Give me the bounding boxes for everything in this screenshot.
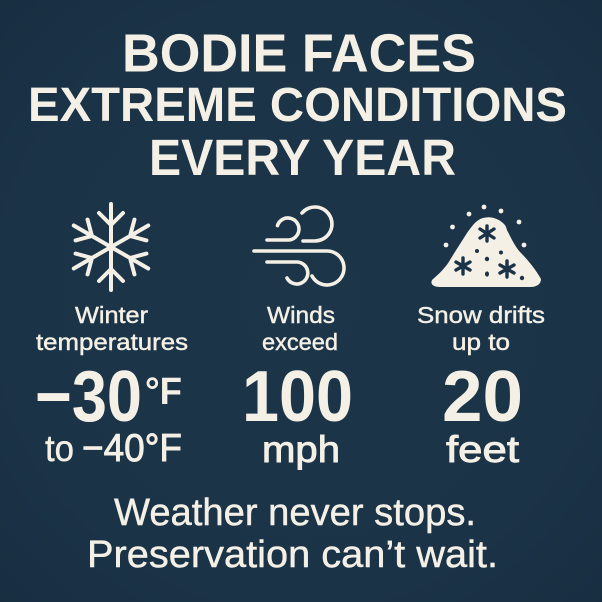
column: winter temperatures: −40°F	[82, 427, 182, 470]
title: BODIE FACES	[122, 24, 476, 84]
icon: snowflake	[68, 204, 154, 290]
title	[28, 24, 567, 186]
closing message	[87, 492, 498, 576]
column: winds: mph	[262, 429, 340, 470]
title: EVERY YEAR	[149, 129, 456, 186]
icon: wind	[254, 207, 344, 285]
column: winds: 100	[242, 357, 353, 437]
column: winds: exceed	[262, 329, 338, 355]
closing message: Weather never stops.	[114, 492, 476, 534]
column: winter temperatures: Winter	[75, 302, 148, 328]
column: snow drifts: feet	[446, 429, 520, 470]
column: winter temperatures: −30	[35, 357, 142, 437]
column: winter temperatures: to	[45, 428, 74, 469]
icon: snow pile	[431, 205, 541, 287]
column: winter temperatures: °F	[145, 371, 182, 413]
column: winter temperatures	[35, 302, 188, 470]
column: winds: Winds	[267, 302, 335, 328]
column: winter temperatures: temperatures	[36, 329, 188, 355]
closing message: Preservation can’t wait.	[87, 534, 498, 576]
column: snow drifts	[417, 302, 545, 470]
column: snow drifts: 20	[442, 357, 523, 437]
column: snow drifts: Snow drifts	[417, 302, 545, 328]
column: snow drifts: up to	[452, 329, 510, 355]
title: EXTREME CONDITIONS	[28, 79, 567, 132]
column: winds	[242, 302, 353, 470]
